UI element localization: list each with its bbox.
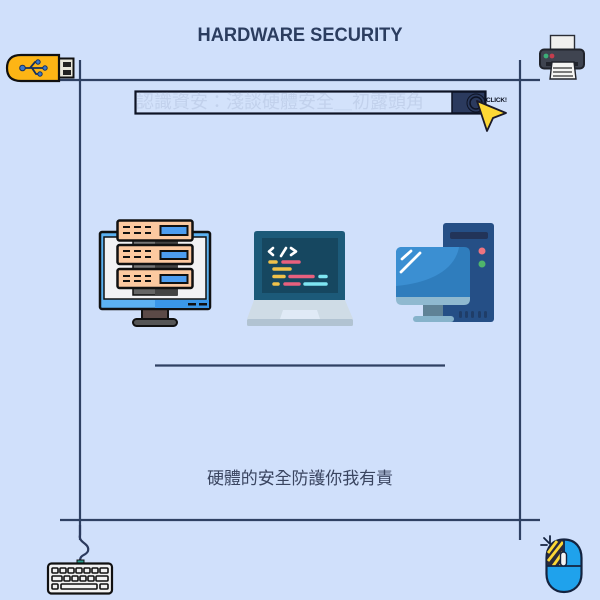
bar title text: 認識資安：淺談硬體安全＿初露頭角: [136, 88, 424, 114]
server unit 1: [118, 220, 192, 240]
icon: keyboard: [48, 525, 112, 594]
server unit 3: [118, 269, 192, 288]
icon: laptop with code: [247, 231, 353, 326]
icon: printer: [540, 36, 584, 79]
icon: desktop computer: [396, 223, 494, 322]
play button block: [452, 92, 485, 113]
cursor arrow: [477, 101, 506, 131]
server unit 2: [118, 245, 192, 264]
click sparks: [541, 536, 550, 545]
icon: computer mouse: [541, 536, 582, 592]
caption: 硬體的安全防護你我有責: [207, 469, 393, 488]
icon: server on monitor: [100, 220, 210, 326]
icon: USB drive: [7, 55, 74, 81]
code lines: [270, 262, 326, 284]
click label: CLICK!: [486, 97, 507, 104]
divider: [155, 364, 445, 367]
video link bar: [136, 88, 507, 131]
code symbols: [269, 248, 296, 256]
title: HARDWARE SECURITY: [198, 24, 402, 46]
